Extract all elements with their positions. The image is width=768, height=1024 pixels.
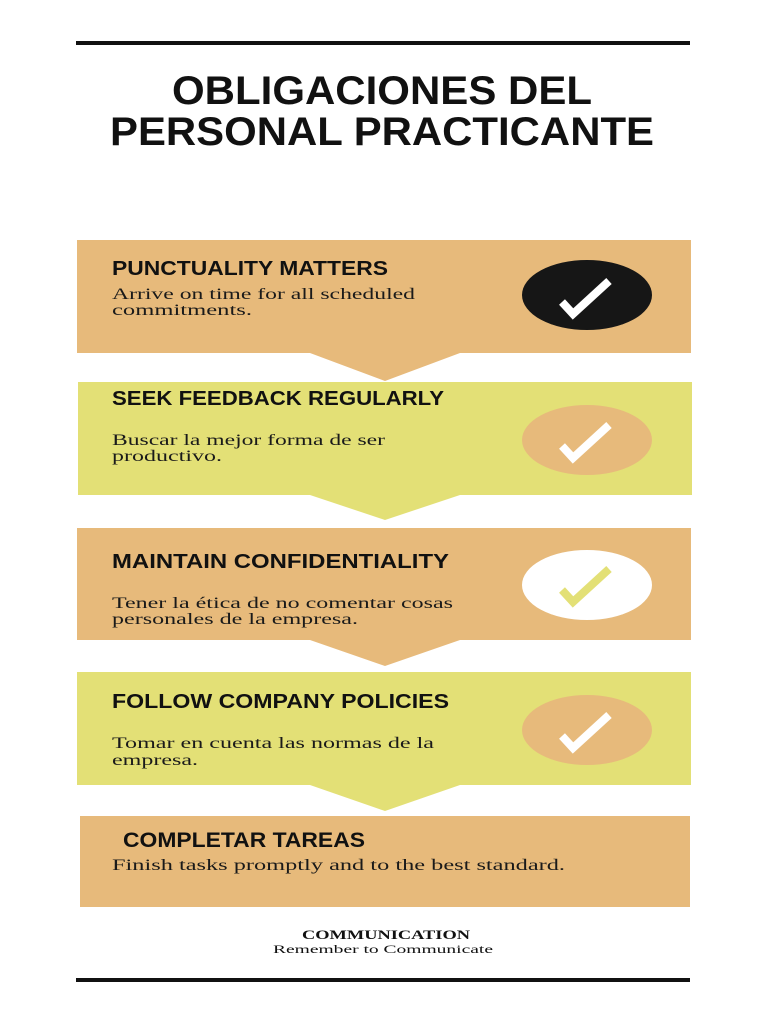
panel: policies: Tomar en cuenta las normas de la [112,735,434,752]
panel: confidentiality: personales de la empresa. [112,611,358,628]
panel: confidentiality: MAINTAIN CONFIDENTIALITY [112,551,450,573]
panel: feedback: productivo. [112,448,222,465]
panel: feedback [78,382,692,520]
panel: policies: FOLLOW COMPANY POLICIES [112,691,449,713]
panel: punctuality: PUNCTUALITY MATTERS [112,258,388,280]
panel: completar tareas: COMPLETAR TAREAS [123,829,365,852]
panel: completar tareas: Finish tasks promptly and to the best standard. [112,857,565,874]
icon: check white [522,550,652,620]
footer: COMMUNICATION [302,927,471,942]
footer: Remember to Communicate [273,942,493,956]
panel: confidentiality: Tener la ética de no comentar cosas [112,595,453,612]
panel: punctuality: Arrive on time for all scheduled [112,286,415,303]
title: OBLIGACIONES DEL [172,69,592,113]
icon: check black [522,260,652,330]
panel: policies [77,672,691,811]
icon: check orange [522,695,652,765]
panel: completar tareas [80,816,690,907]
panel: punctuality: commitments. [112,302,252,319]
footer [273,927,493,956]
panel: policies: empresa. [112,752,198,769]
panel: feedback: Buscar la mejor forma de ser [112,432,386,449]
title [110,69,654,154]
panel: confidentiality [77,528,691,666]
title: PERSONAL PRACTICANTE [110,110,654,154]
panel: punctuality [77,240,691,381]
panel: feedback: SEEK FEEDBACK REGULARLY [112,388,445,410]
icon: check orange [522,405,652,475]
